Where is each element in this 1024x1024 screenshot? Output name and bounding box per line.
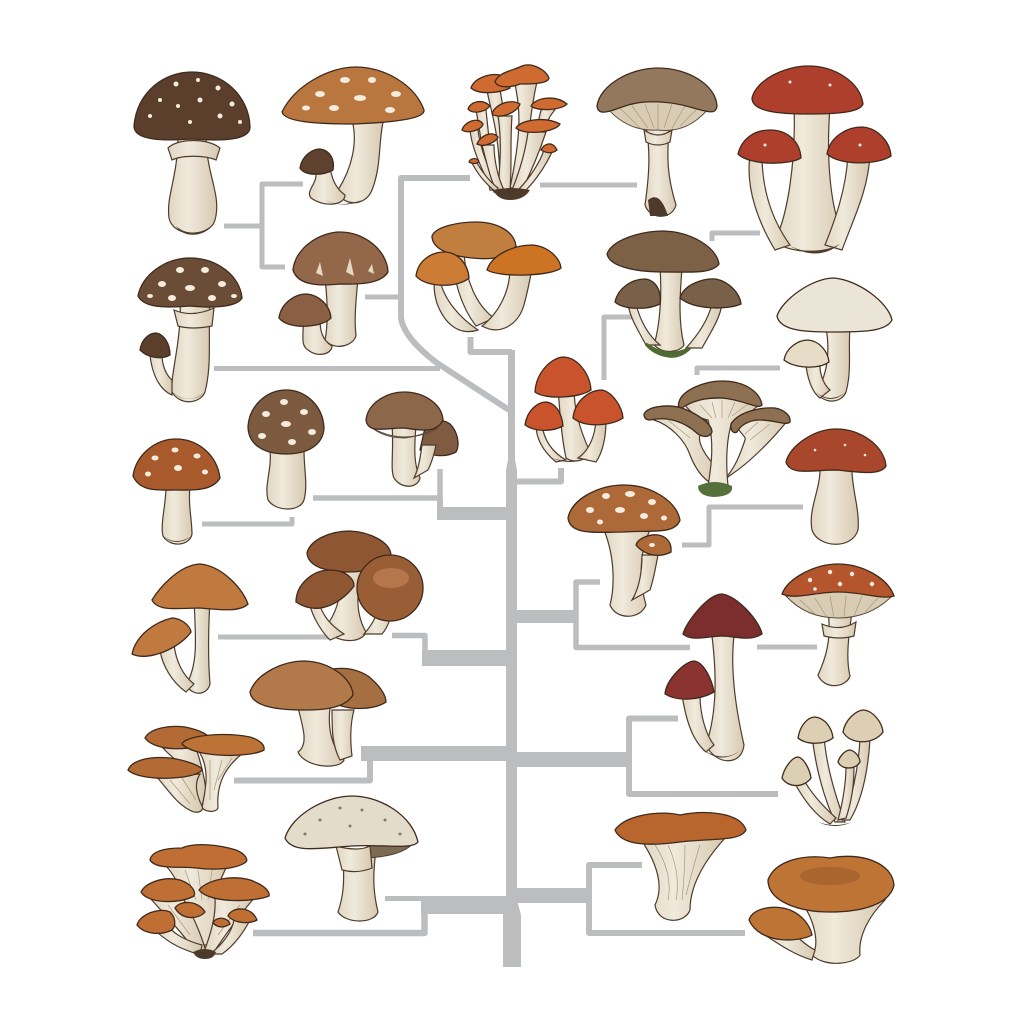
mushroom: maroon conical pair <box>665 594 762 761</box>
mushroom: large orange funnel with small side cap <box>749 856 894 963</box>
mushroom: three red caps <box>738 66 891 254</box>
mushroom: orange-brown spotted small <box>133 439 220 544</box>
mushroom: red speckled cap with gills <box>782 564 894 686</box>
mushroom: funnel grey-brown cluster <box>644 381 790 497</box>
mushroom: orange shelf cluster <box>128 726 264 812</box>
mushroom: brown egg cap with white patches <box>248 390 324 509</box>
mushroom: red-brown domed cap <box>786 429 886 544</box>
mushroom: grey-brown cap with gills <box>597 68 717 216</box>
mushroom: brown wavy cap with two side caps <box>607 231 741 356</box>
mushroom: white pale cap <box>777 278 892 401</box>
mushroom: white speckled cap with gills <box>285 796 418 921</box>
mushroom: brown pair <box>366 392 458 486</box>
mushroom: brown cap with small companion <box>279 232 388 354</box>
mushroom: large speckled orange cap <box>568 485 680 616</box>
mushroom: reddish-brown trio <box>296 531 423 641</box>
mushroom: orange conical pair <box>132 564 248 693</box>
mushroom: golden-orange trio <box>416 222 561 332</box>
mushroom: orange multi-tier cluster <box>137 845 269 959</box>
phylogenetic tree connectors <box>202 178 817 967</box>
mushroom: orange-brown flat cap with small companion <box>282 67 424 204</box>
mushroom: small pale speckled cluster <box>782 710 883 826</box>
mushroom: wide tan caps <box>250 661 386 766</box>
mushroom: small orange cluster <box>462 65 567 200</box>
mushroom: dark spotted cap with ringed stem <box>138 258 242 402</box>
mushroom: orange chanterelle <box>615 813 746 920</box>
mushroom: dark brown spotted cap <box>134 72 250 235</box>
mushroom: small red-orange trio <box>525 357 623 462</box>
